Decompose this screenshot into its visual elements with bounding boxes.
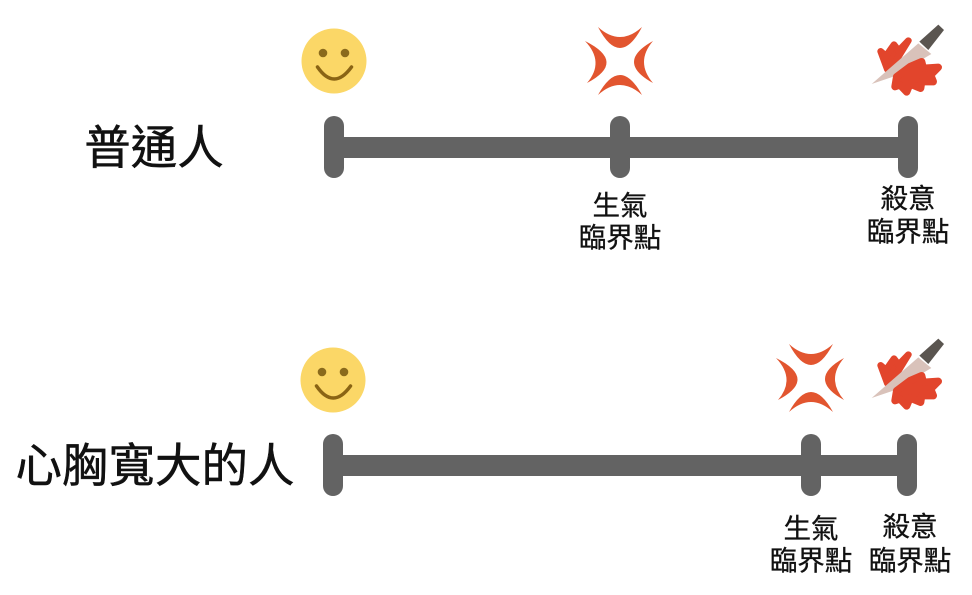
- icon: smiley: [302, 28, 366, 94]
- icon: anger mark: [776, 344, 844, 412]
- label: murder threshold: 臨界點: [867, 216, 949, 247]
- label: murder threshold: 殺意: [880, 183, 936, 214]
- timeline bar: ordinary person: [324, 116, 918, 178]
- icon: knife and blood splat: [872, 339, 944, 406]
- label: anger threshold: 臨界點: [770, 545, 852, 576]
- icon: smiley: [300, 348, 366, 412]
- heading: big-hearted person: 心胸寬大的人: [16, 440, 294, 492]
- label: anger threshold: [579, 190, 661, 253]
- timeline bar: big-hearted person: [323, 434, 917, 496]
- label: anger threshold: 臨界點: [579, 222, 661, 253]
- label: murder threshold: 臨界點: [869, 545, 951, 576]
- label: murder threshold: [867, 183, 949, 247]
- heading: ordinary person: 普通人: [84, 122, 224, 174]
- panel: ordinary person: [84, 25, 949, 253]
- panel: big-hearted person: [16, 339, 951, 576]
- label: murder threshold: 殺意: [882, 511, 938, 542]
- icon: knife and blood splat: [872, 25, 944, 92]
- label: anger threshold: 生氣: [784, 513, 838, 544]
- icon: anger mark: [585, 27, 653, 95]
- label: anger threshold: 生氣: [592, 190, 648, 221]
- label: murder threshold: [869, 511, 951, 576]
- label: anger threshold: [770, 513, 852, 576]
